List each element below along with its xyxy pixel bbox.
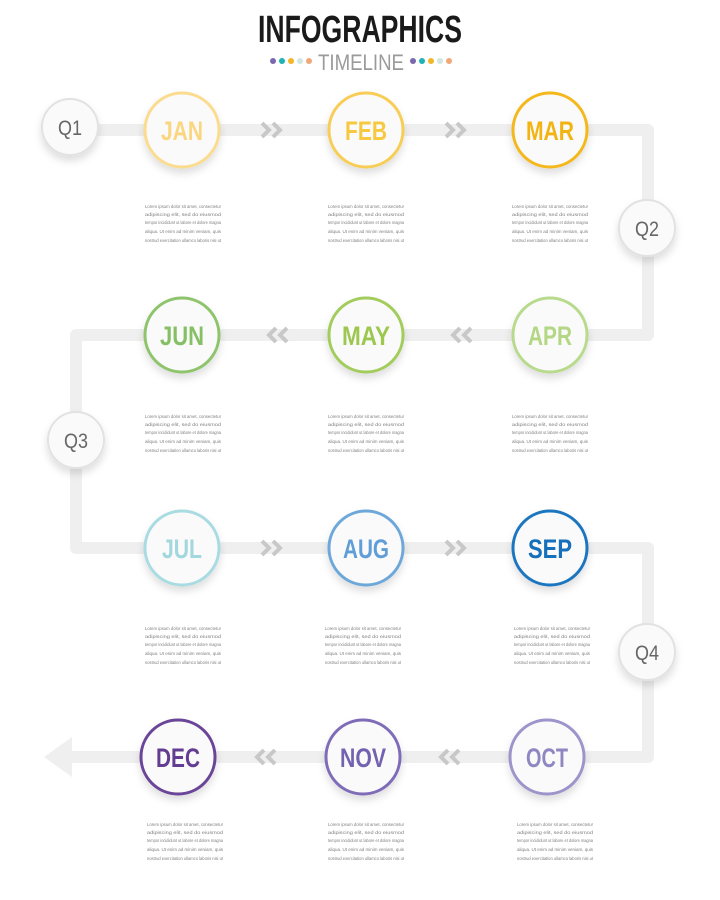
month labels: SEP [528, 534, 572, 564]
month labels: JAN [161, 116, 203, 146]
month labels: JUN [160, 321, 204, 351]
month labels: NOV [340, 743, 386, 773]
chevrons [257, 123, 471, 764]
month labels: MAR [526, 116, 574, 146]
month labels: OCT [526, 743, 568, 773]
text: Q3 [64, 430, 88, 453]
timeline path [70, 130, 648, 757]
arrow head [44, 737, 72, 777]
month circles [141, 93, 587, 794]
month labels: MAY [342, 321, 390, 351]
title: INFOGRAPHICS [258, 9, 462, 51]
subtitle: timeline [270, 50, 452, 75]
month labels: DEC [156, 743, 200, 773]
month labels: AUG [343, 534, 389, 564]
text: Q4 [635, 642, 659, 665]
text: Q1 [58, 117, 82, 140]
month labels: FEB [345, 116, 387, 146]
text: Q2 [635, 218, 659, 241]
description texts [145, 204, 594, 862]
month labels [156, 116, 574, 773]
quarter markers [42, 99, 675, 680]
month labels: JUL [162, 534, 202, 564]
month labels: APR [528, 321, 572, 351]
subtitle: timeline: TIMELINE [318, 50, 404, 75]
